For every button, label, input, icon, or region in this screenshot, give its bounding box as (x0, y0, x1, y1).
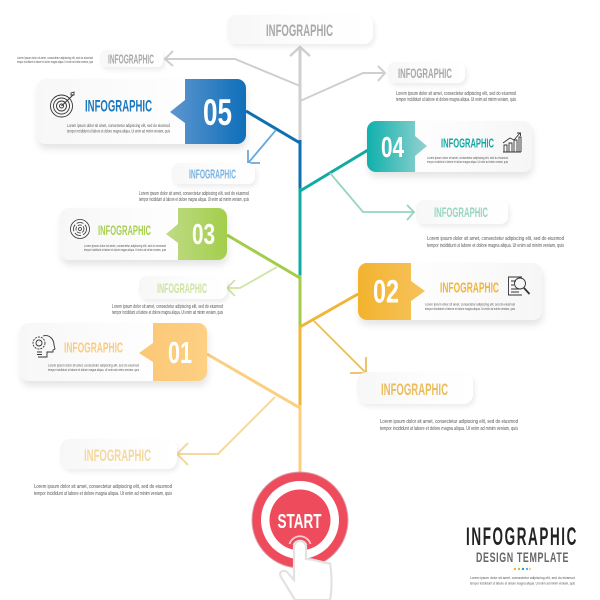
light teal text (427, 236, 564, 249)
icon: bar chart (503, 133, 521, 152)
gray left text (17, 56, 93, 64)
light blue label (172, 163, 255, 184)
tab: 05 (170, 79, 246, 144)
title text: Lorem ipsum dolor sit amet, consectetur adipiscing elit, sed do eiusmod (470, 575, 575, 580)
text 03: tempor incididunt ut labore et dolore magna aliqua. Ut enim ad minim veniam, quis (84, 247, 166, 252)
arrow: dark orange (314, 321, 366, 373)
number 04: 04 (381, 132, 404, 164)
colored dots (514, 568, 531, 570)
icon: magnifier on document (508, 277, 530, 295)
arrow: light green (227, 267, 277, 296)
orange text: Lorem ipsum dolor sit amet, consectetur adipiscing elit, sed do eiusmod (380, 419, 518, 425)
text 04: Lorem ipsum dolor sit amet, consectetur adipiscing elit, sed do eiusmod (427, 156, 508, 160)
arrow: gray right branch (300, 66, 385, 101)
light blue label: INFOGRAPHIC (189, 166, 236, 182)
number 05: 05 (203, 92, 232, 133)
text 05 (67, 123, 171, 134)
light orange label: INFOGRAPHIC (84, 446, 151, 465)
start label: START (278, 511, 322, 533)
tab: 01 (139, 323, 207, 381)
top pill: INFOGRAPHIC (266, 21, 333, 40)
number 01: 01 (168, 335, 192, 370)
text 01: tempor incididunt ut labore et dolore magna aliqua. Ut enim ad minim veniam, quis (48, 367, 139, 372)
light orange text: tempor incididunt ut labore et dolore magna aliqua. Ut enim ad minim veniam, quis (34, 491, 172, 497)
heading 04: INFOGRAPHIC (441, 136, 494, 150)
light blue text (139, 191, 249, 203)
gray right text: Lorem ipsum dolor sit amet, consectetur adipiscing elit, sed do eiusmod (396, 91, 516, 97)
tab: 03 (166, 208, 227, 260)
text 04: tempor incididunt ut labore et dolore magna aliqua. Ut enim ad minim veniam, quis (427, 160, 508, 164)
gray left text: tempor incididunt ut labore et dolore magna aliqua. Ut enim ad minim veniam, quis (17, 60, 93, 64)
light teal label: INFOGRAPHIC (434, 204, 488, 220)
light teal text: Lorem ipsum dolor sit amet, consectetur adipiscing elit, sed do eiusmod (427, 236, 564, 242)
connector: dark orange (300, 294, 358, 327)
text 02 (425, 302, 515, 311)
text 03 (84, 243, 166, 252)
text 04 (427, 156, 508, 164)
touch ripple (290, 536, 310, 545)
connector: light orange (207, 354, 300, 408)
title block (466, 523, 578, 586)
arrow: light teal (330, 173, 414, 220)
icon: target (50, 92, 74, 117)
orange text: tempor incididunt ut labore et dolore magna aliqua. Ut enim ad minim veniam, quis (380, 426, 518, 432)
orange label (357, 372, 473, 404)
text 01: Lorem ipsum dolor sit amet, consectetur adipiscing elit, sed do eiusmod (48, 362, 139, 368)
top pill (227, 15, 373, 44)
orange text (380, 419, 518, 432)
light orange text (34, 484, 172, 497)
text 02: Lorem ipsum dolor sit amet, consectetur adipiscing elit, sed do eiusmod (425, 302, 515, 306)
connector: blue (246, 111, 300, 143)
arrow: light orange (177, 397, 275, 465)
gray right label: INFOGRAPHIC (398, 65, 452, 81)
gray left label: INFOGRAPHIC (108, 52, 154, 66)
gray left text: Lorem ipsum dolor sit amet, consectetur adipiscing elit, sed do eiusmod (17, 56, 93, 60)
text 02: tempor incididunt ut labore et dolore magna aliqua. Ut enim ad minim veniam, quis (425, 306, 515, 311)
gray left label (100, 50, 163, 67)
title text (470, 575, 575, 586)
tab: 02 (358, 263, 425, 320)
panel: step 05 (37, 79, 246, 144)
panel: step 04 (367, 121, 532, 172)
heading 02: INFOGRAPHIC (440, 280, 499, 296)
text 01 (48, 362, 139, 372)
light green text: tempor incididunt ut labore et dolore magna aliqua. Ut enim ad minim veniam, quis (112, 310, 223, 316)
heading 01: INFOGRAPHIC (64, 340, 123, 356)
icon: pointing hand (280, 541, 332, 600)
panel: step 01 (20, 323, 207, 381)
text 05: Lorem ipsum dolor sit amet, consectetur adipiscing elit, sed do eiusmod (67, 123, 170, 128)
gray right text: tempor incididunt ut labore et dolore magna aliqua. Ut enim ad minim veniam, quis (396, 97, 516, 103)
icon: head with gear (33, 336, 55, 357)
number 03: 03 (192, 219, 215, 251)
light green label: INFOGRAPHIC (157, 280, 207, 296)
icon: maze circle (70, 220, 90, 238)
light blue text: Lorem ipsum dolor sit amet, consectetur adipiscing elit, sed do eiusmod (139, 191, 249, 197)
text 03: Lorem ipsum dolor sit amet, consectetur adipiscing elit, sed do eiusmod (84, 243, 166, 248)
connector: green (227, 235, 300, 278)
arrow: gray left branch (165, 51, 300, 86)
heading 05: INFOGRAPHIC (85, 98, 152, 116)
light green label (139, 276, 227, 299)
connector: teal (300, 150, 368, 191)
tab: 04 (367, 121, 427, 172)
light orange label (60, 439, 177, 469)
panel: step 02 (358, 263, 542, 320)
start button (252, 472, 348, 568)
light green text (112, 304, 223, 316)
heading 03: INFOGRAPHIC (98, 223, 151, 238)
text 05: tempor incididunt ut labore et dolore magna aliqua. Ut enim ad minim veniam, quis (67, 128, 171, 134)
panel: step 03 (60, 208, 227, 260)
light green text: Lorem ipsum dolor sit amet, consectetur adipiscing elit, sed do eiusmod (112, 304, 223, 310)
gray right label (388, 62, 465, 83)
arrow: trunk top (290, 47, 310, 56)
arrow: light blue (248, 130, 276, 163)
number 02: 02 (373, 274, 399, 310)
gray right text (396, 91, 516, 103)
light teal label (416, 200, 508, 224)
light orange text: Lorem ipsum dolor sit amet, consectetur adipiscing elit, sed do eiusmod (34, 484, 172, 490)
central trunk (298, 47, 302, 472)
light blue text: tempor incididunt ut labore et dolore magna aliqua. Ut enim ad minim veniam, quis (139, 197, 249, 203)
orange label: INFOGRAPHIC (381, 380, 448, 399)
